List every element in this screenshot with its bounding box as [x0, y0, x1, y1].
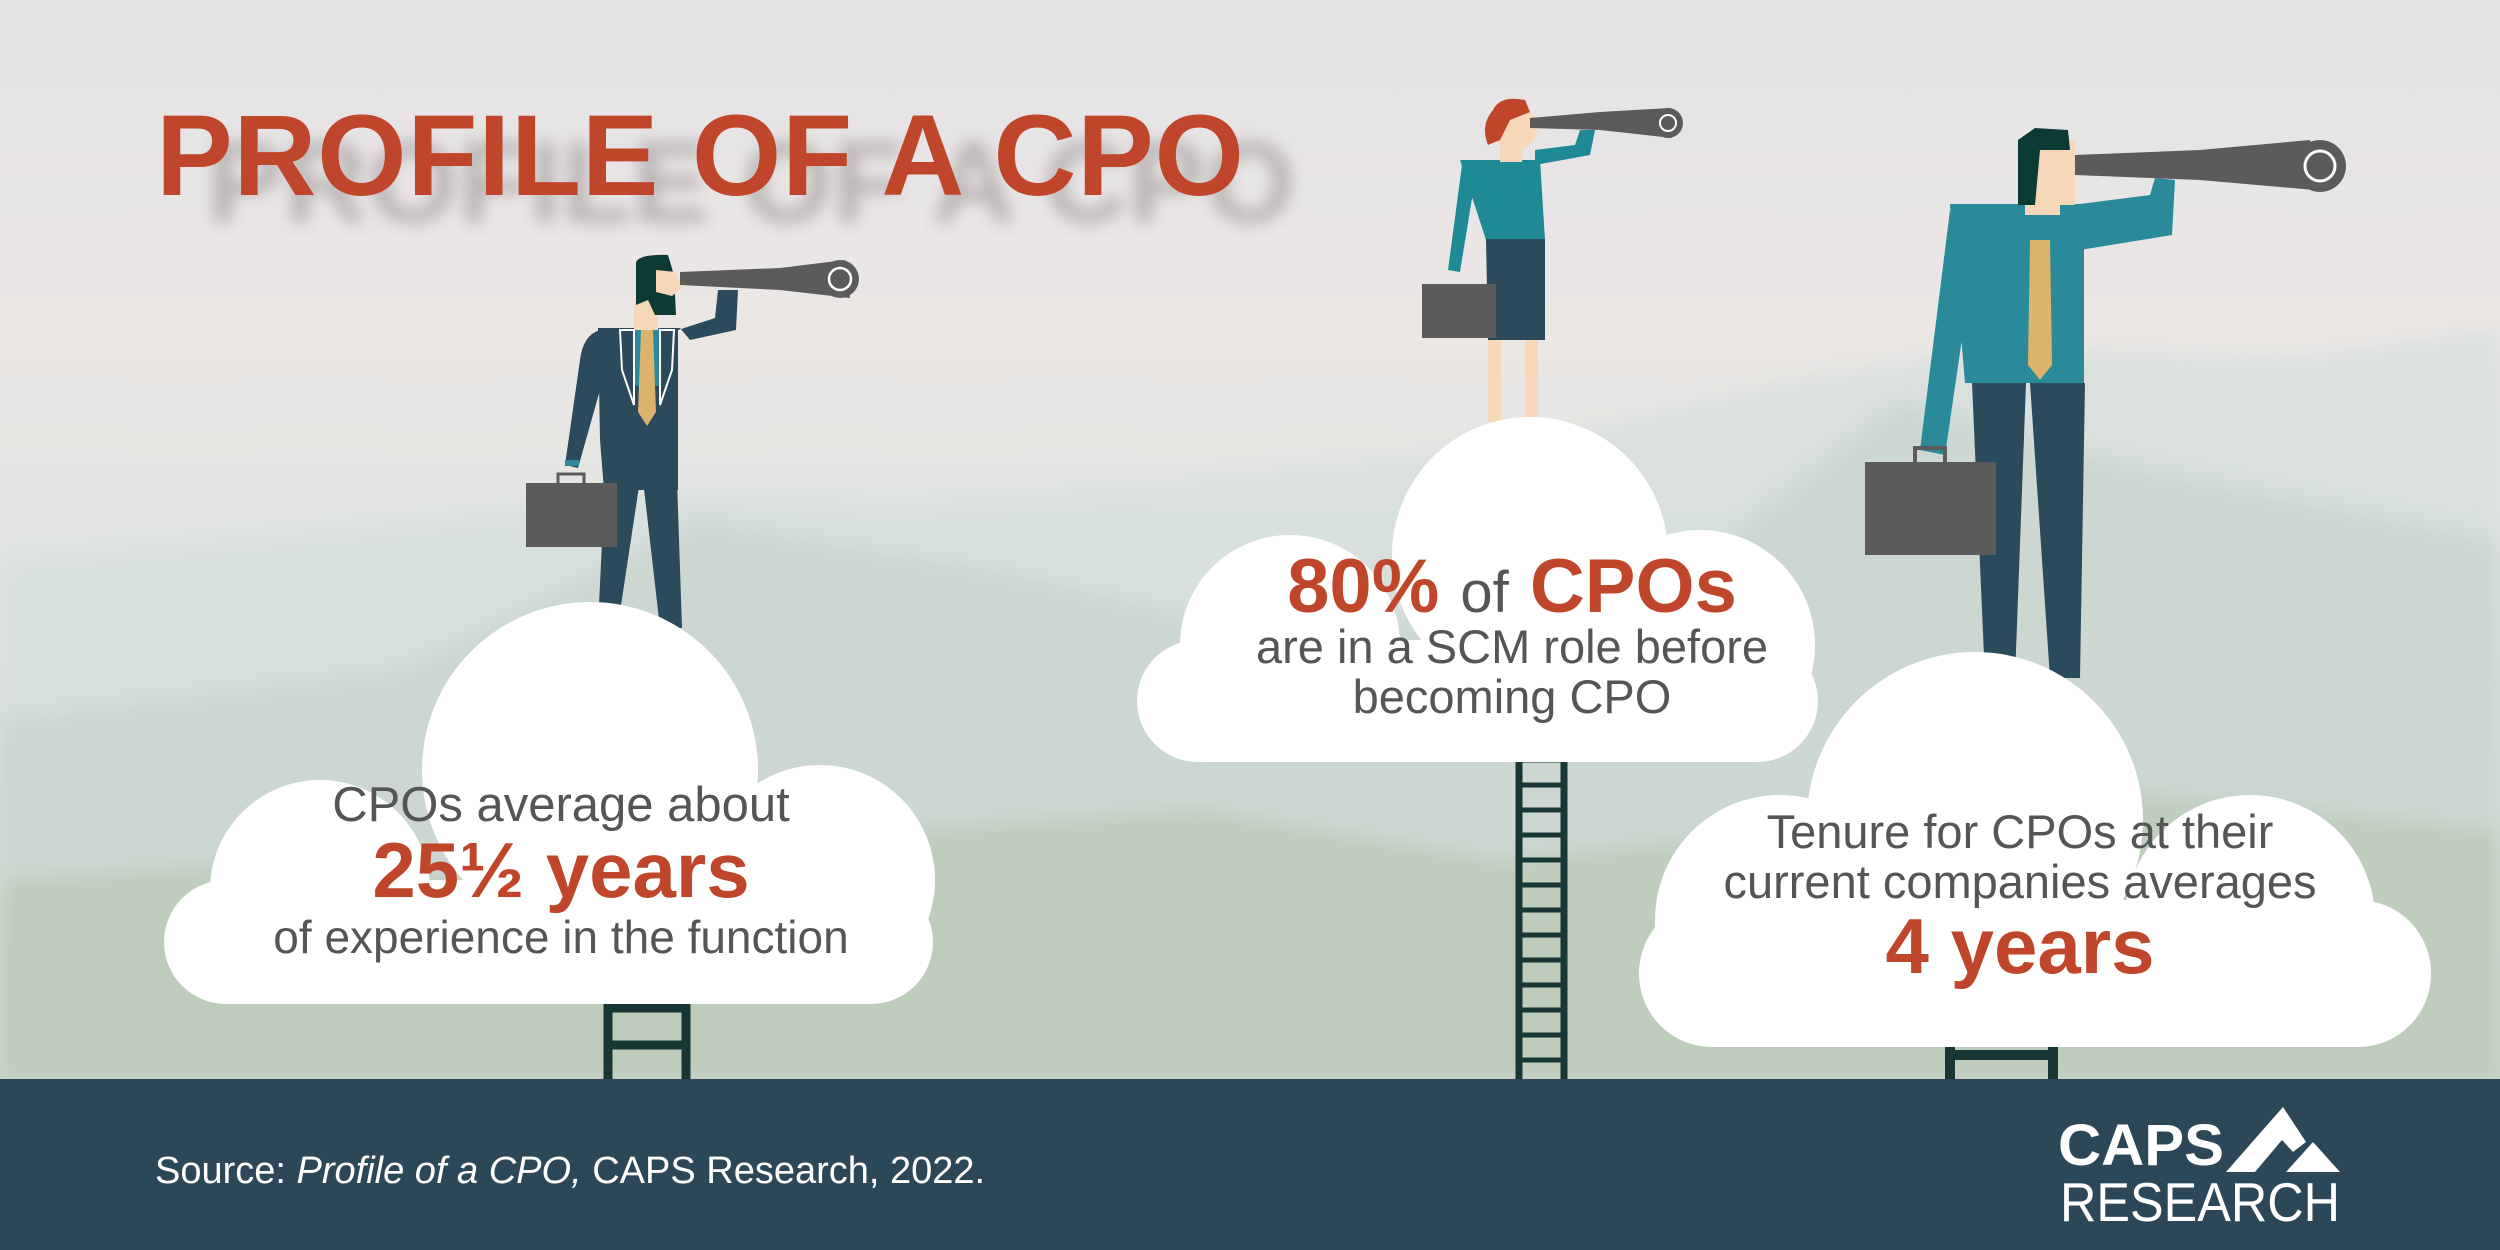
- cloud 2 text: are in a SCM role before: [1256, 620, 1768, 673]
- figure: man 1 with telescope: [526, 255, 859, 628]
- cloud 1 text: of experience in the function: [273, 911, 849, 963]
- footer bar: [0, 1079, 2500, 1250]
- ladder 1: [608, 969, 686, 1079]
- title shadow: PROFILE OF A CPO: [207, 119, 1295, 247]
- cloud 1 text: 25½ years: [372, 826, 750, 914]
- cloud 2 text: [1256, 544, 1768, 723]
- cloud 3 text: current companies averages: [1723, 855, 2317, 908]
- cloud 3: [1639, 652, 2431, 1047]
- cloud 3 text: 4 years: [1886, 902, 2154, 990]
- source text: Source: Profile of a CPO, CAPS Research, 2022.: [155, 1150, 985, 1192]
- figure: woman with telescope: [1422, 99, 1683, 422]
- ladder 2: [1519, 730, 1564, 1079]
- cloud 1 text: CPOs average about: [332, 778, 790, 832]
- logo: CAPS Research: [2058, 1107, 2340, 1233]
- cloud 2: [1137, 417, 1818, 762]
- title: PROFILE OF A CPO: [156, 92, 1244, 220]
- cloud 1 text: [273, 778, 849, 963]
- cloud 2 text: becoming CPO: [1353, 670, 1671, 723]
- figure: man 3 with telescope: [1865, 128, 2346, 678]
- logo: CAPS Research: CAPS: [2058, 1113, 2224, 1178]
- background mountains: [0, 330, 2500, 1080]
- cloud 2 text: 80% of CPOs: [1287, 544, 1737, 629]
- cloud 3 text: Tenure for CPOs at their: [1767, 805, 2273, 858]
- logo: CAPS Research: RESEARCH: [2060, 1171, 2340, 1233]
- ladder 3: [1950, 984, 2053, 1079]
- cloud 3 text: [1723, 805, 2317, 990]
- cloud 1: [164, 602, 935, 1004]
